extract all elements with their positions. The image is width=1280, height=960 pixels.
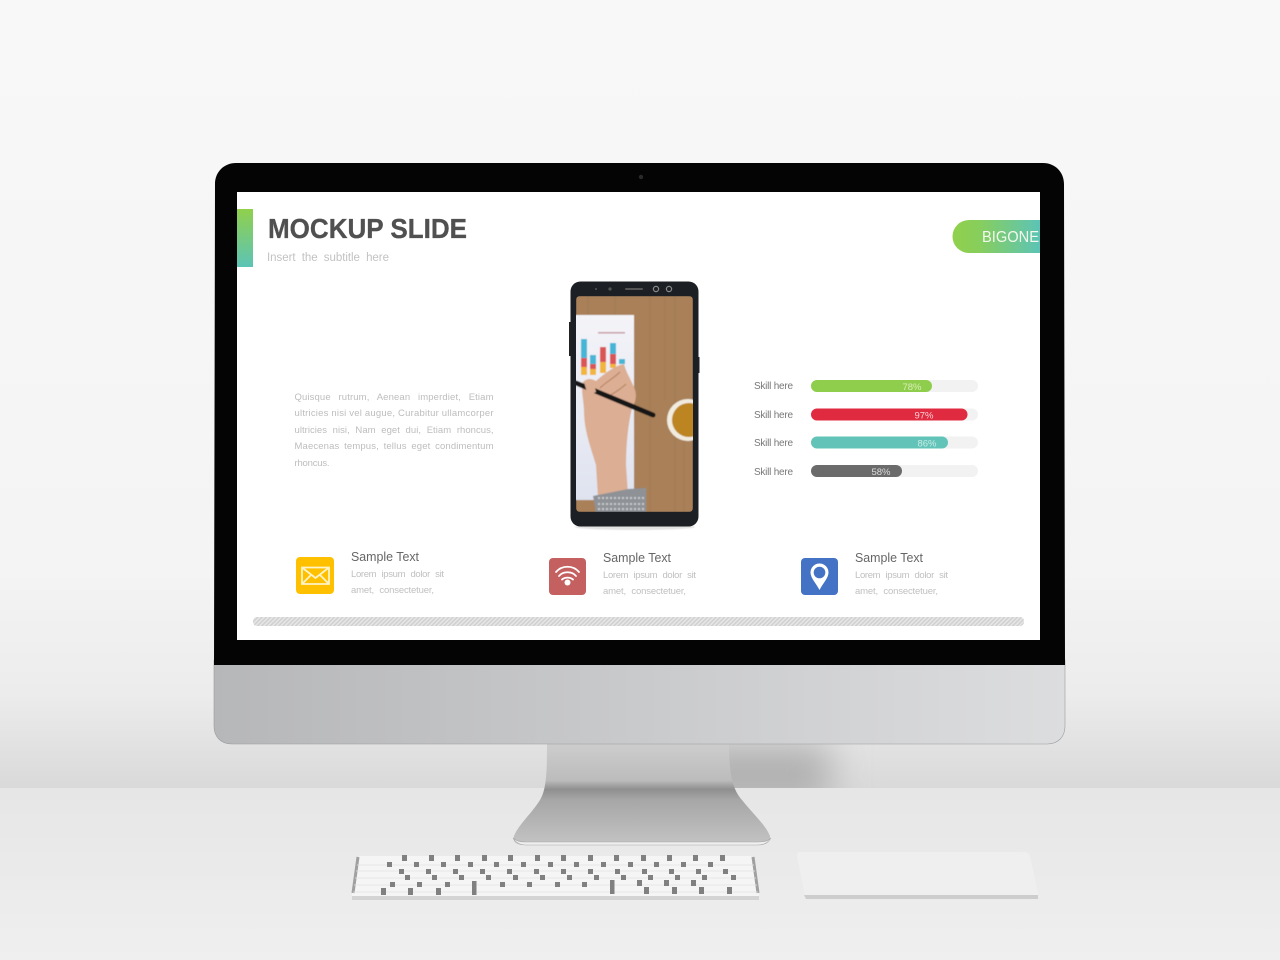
body paragraph: rhoncus. — [294, 458, 330, 469]
skill bar 97% — [754, 408, 978, 422]
feature: mail — [296, 549, 444, 596]
icon: wifi — [549, 558, 586, 595]
skill bar 97%: Skill here — [754, 410, 793, 421]
body paragraph — [294, 392, 494, 469]
webcam — [639, 175, 643, 179]
paper — [570, 315, 634, 500]
phone body — [570, 282, 698, 526]
icon: map pin — [801, 558, 838, 595]
key gaps — [381, 855, 736, 895]
paper chart — [581, 332, 625, 375]
feature: location: amet, consectetuer, — [855, 586, 938, 597]
feature: location: Sample Text — [855, 550, 923, 565]
side buttons — [569, 322, 572, 356]
desk surface — [0, 788, 1280, 960]
pen — [576, 383, 653, 415]
phone mockup — [569, 282, 709, 530]
feature: wifi: amet, consectetuer, — [603, 586, 686, 597]
skill bar 86%: 86% — [917, 438, 937, 450]
feature: location — [801, 550, 948, 597]
skill bar 86%: Skill here — [754, 438, 793, 449]
monitor cast shadow on wall — [729, 744, 844, 788]
body paragraph: ultricies nisi, Nam eget dui, Etiam rhoncus, — [294, 425, 494, 436]
skill bar 78%: 78% — [902, 382, 922, 393]
slide header accent bar — [237, 209, 253, 267]
skill bars — [754, 380, 978, 478]
icon: envelope — [296, 557, 334, 594]
skill bar 58% — [754, 465, 978, 478]
monitor chin — [214, 660, 1065, 744]
body paragraph: ultricies nisi vel augue, Curabitur ullamcorper — [294, 408, 494, 419]
sleeve — [593, 488, 646, 512]
skill bar 97%: 97% — [914, 410, 934, 422]
title: MOCKUP SLIDE — [268, 213, 467, 244]
feature: wifi: Lorem ipsum dolor sit — [603, 570, 696, 581]
feature: wifi: Sample Text — [603, 550, 671, 565]
trackpad — [797, 852, 1038, 899]
feature: mail: Sample Text — [351, 549, 419, 564]
skill bar 86% — [754, 436, 978, 450]
arm and hand — [582, 364, 636, 497]
feature: mail: amet, consectetuer, — [351, 585, 434, 596]
phone shadow — [575, 524, 695, 530]
phone sensors — [595, 286, 672, 292]
screen — [237, 192, 1040, 640]
monitor stand — [513, 744, 771, 845]
body paragraph: Maecenas tempus, tellus eget condimentum — [294, 441, 494, 452]
monitor bezel — [214, 163, 1065, 665]
brand pill: BIGONE — [982, 229, 1039, 246]
keyboard — [352, 855, 759, 900]
feature: wifi — [549, 550, 696, 597]
feature: location: Lorem ipsum dolor sit — [855, 570, 948, 581]
skill bar 78% — [754, 380, 978, 393]
subtitle: Insert the subtitle here — [267, 252, 389, 264]
hatched footer bar — [253, 617, 1024, 626]
feature: mail: Lorem ipsum dolor sit — [351, 569, 444, 580]
wood desk — [576, 296, 693, 512]
brand pill — [953, 220, 1040, 253]
monitor — [214, 163, 1065, 744]
skill bar 58%: 58% — [871, 467, 891, 478]
phone photo: desk with chart and hand — [576, 296, 693, 512]
skill bar 58%: Skill here — [754, 467, 793, 478]
skill bar 78%: Skill here — [754, 381, 793, 392]
body paragraph: Quisque rutrum, Aenean imperdiet, Etiam — [294, 392, 494, 403]
coffee cup — [666, 398, 693, 442]
